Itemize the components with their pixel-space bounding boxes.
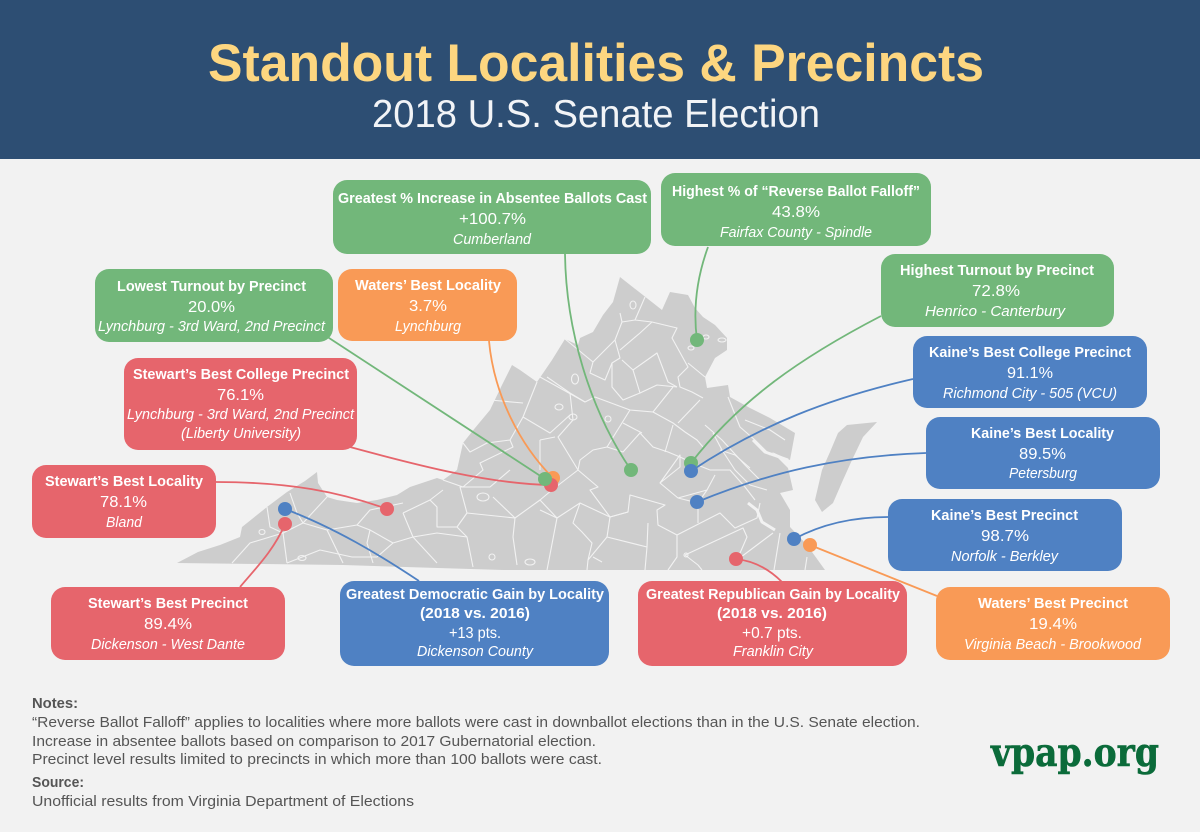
connector: Highest turnout [691,316,881,463]
notes and source text [32,695,920,810]
panel: Waters' Best Locality: Lynchburg [395,318,462,335]
panel: Greatest % Increase in Absentee Ballots Cast [333,180,651,254]
logo: vpap.org: vpap.org [990,730,1159,776]
panel: Lowest Turnout by Precinct [95,269,333,342]
panel: Kaine's Best Locality: Kaine’s Best Locality [971,425,1115,442]
notes and source text: Notes: [32,695,78,712]
connector: Stewart college precinct [350,447,551,485]
panel: Lowest Turnout by Precinct: Lowest Turnout by Precinct [117,278,306,295]
panel: Lowest Turnout by Precinct: Lynchburg - 3rd Ward, 2nd Precinct [98,318,326,335]
panel: Kaine's Best Precinct: Norfolk - Berkley [951,548,1059,565]
panel: Stewart's Best College Precinct [124,358,357,450]
connector: Spindle [695,247,708,340]
panel: Highest Turnout by Precinct: Highest Turnout by Precinct [900,262,1094,279]
panel: Greatest Democratic Gain by Locality [340,581,609,666]
panel: Greatest Republican Gain by Locality [638,581,907,666]
connector: Berkley [794,517,888,539]
title: Standout Localities & Precincts [208,34,984,93]
panel: Stewart's Best Precinct: Stewart’s Best Precinct [88,595,248,612]
panel: Greatest Democratic Gain by Locality: Dickenson County [417,643,534,660]
panel: Stewart's Best College Precinct: Stewart’s Best College Precinct [133,366,349,383]
connector: Stewart best precinct [240,524,285,587]
panel: Highest Turnout by Precinct [881,254,1114,327]
notes and source text: Unofficial results from Virginia Department of Elections [32,793,414,810]
panel: Kaine's Best College Precinct: 91.1% [1007,365,1053,382]
panel: Greatest Republican Gain by Locality: Franklin City [733,643,814,660]
panel: Stewart's Best Locality: Bland [106,514,143,531]
panel: Kaine's Best Locality: Petersburg [1009,465,1078,482]
connector: Waters best locality [489,341,553,478]
panel: Waters' Best Locality [338,269,517,341]
connector: Democratic gain [285,509,419,581]
panel: Highest % of Reverse Ballot Falloff [661,173,931,246]
panel: Greatest % Increase in Absentee Ballots Cast: Greatest % Increase in Absentee Ballots Cast [338,190,647,207]
panel: Stewart's Best Precinct: 89.4% [144,616,192,633]
panel: Greatest % Increase in Absentee Ballots Cast: +100.7% [459,211,526,228]
location markers [278,333,817,566]
panel: Stewart's Best Locality: Stewart’s Best Locality [45,473,204,490]
connector: Kaine college precinct [691,379,913,471]
panel: Waters' Best Locality: Waters’ Best Locality [355,277,502,294]
panel: Waters' Best Locality: 3.7% [409,298,447,315]
notes and source text: Precinct level results limited to precincts in which more than 100 ballots were cast. [32,751,602,768]
panel: Greatest Democratic Gain by Locality: Greatest Democratic Gain by Locality [346,586,605,603]
panel: Highest % of Reverse Ballot Falloff: Highest % of “Reverse Ballot Falloff” [672,183,920,200]
panel: Waters' Best Precinct: 19.4% [1029,616,1077,633]
panel: Highest % of Reverse Ballot Falloff: Fairfax County - Spindle [720,224,872,241]
panel: Stewart's Best College Precinct: Lynchburg - 3rd Ward, 2nd Precinct [127,406,355,423]
notes and source text: Source: [32,774,84,791]
connector: Cumberland [565,254,631,470]
notes and source text: Increase in absentee ballots based on comparison to 2017 Gubernatorial election. [32,733,596,750]
map of Virginia localities [177,277,877,570]
panel: Kaine's Best College Precinct: Kaine’s Best College Precinct [929,344,1131,361]
panel: Stewart's Best Locality [32,465,216,538]
panel: Highest Turnout by Precinct: Henrico - Canterbury [925,303,1067,320]
panel: Stewart's Best Locality: 78.1% [100,494,147,511]
notes and source text: “Reverse Ballot Falloff” applies to localities where more ballots were cast in downballot elections than in the U.S. Senate election. [32,714,920,731]
connector: Lowest turnout [326,336,545,479]
subtitle: 2018 U.S. Senate Election [372,93,820,136]
panel: Stewart's Best College Precinct: 76.1% [217,387,264,404]
panel: Stewart's Best Precinct [51,587,285,660]
panel: Waters' Best Precinct: Waters’ Best Precinct [978,595,1128,612]
connector: Republican gain [736,559,782,582]
panel: Greatest % Increase in Absentee Ballots Cast: Cumberland [453,231,532,248]
panel: Greatest Republican Gain by Locality: (2018 vs. 2016) [717,605,827,622]
panel: Kaine's Best Locality [926,417,1160,489]
panel: Kaine's Best Precinct [888,499,1122,571]
panel: Kaine's Best Precinct: Kaine’s Best Precinct [931,507,1078,524]
panel: Greatest Democratic Gain by Locality: (2018 vs. 2016) [420,605,530,622]
panel: Lowest Turnout by Precinct: 20.0% [188,299,235,316]
panel: Kaine's Best College Precinct: Richmond City - 505 (VCU) [943,385,1117,402]
panel: Waters' Best Precinct: Virginia Beach - Brookwood [964,636,1142,653]
header banner [0,0,1200,159]
panel: Kaine's Best Precinct: 98.7% [981,528,1029,545]
panel: Stewart's Best Precinct: Dickenson - West Dante [91,636,245,653]
panel: Greatest Democratic Gain by Locality: +13 pts. [449,625,501,642]
panel: Greatest Republican Gain by Locality: +0.7 pts. [742,625,802,642]
panel: Kaine's Best College Precinct [913,336,1147,408]
connector: Brookwood [810,545,937,596]
panel: Waters' Best Precinct [936,587,1170,660]
panel: Stewart's Best College Precinct: (Liberty University) [181,425,301,442]
connector: Petersburg [697,453,926,502]
panel: Greatest Republican Gain by Locality: Greatest Republican Gain by Locality [646,586,901,603]
connector: Stewart best locality [216,482,387,509]
panel: Highest % of Reverse Ballot Falloff: 43.8% [772,204,820,221]
panel: Kaine's Best Locality: 89.5% [1019,446,1066,463]
panel: Highest Turnout by Precinct: 72.8% [972,283,1020,300]
